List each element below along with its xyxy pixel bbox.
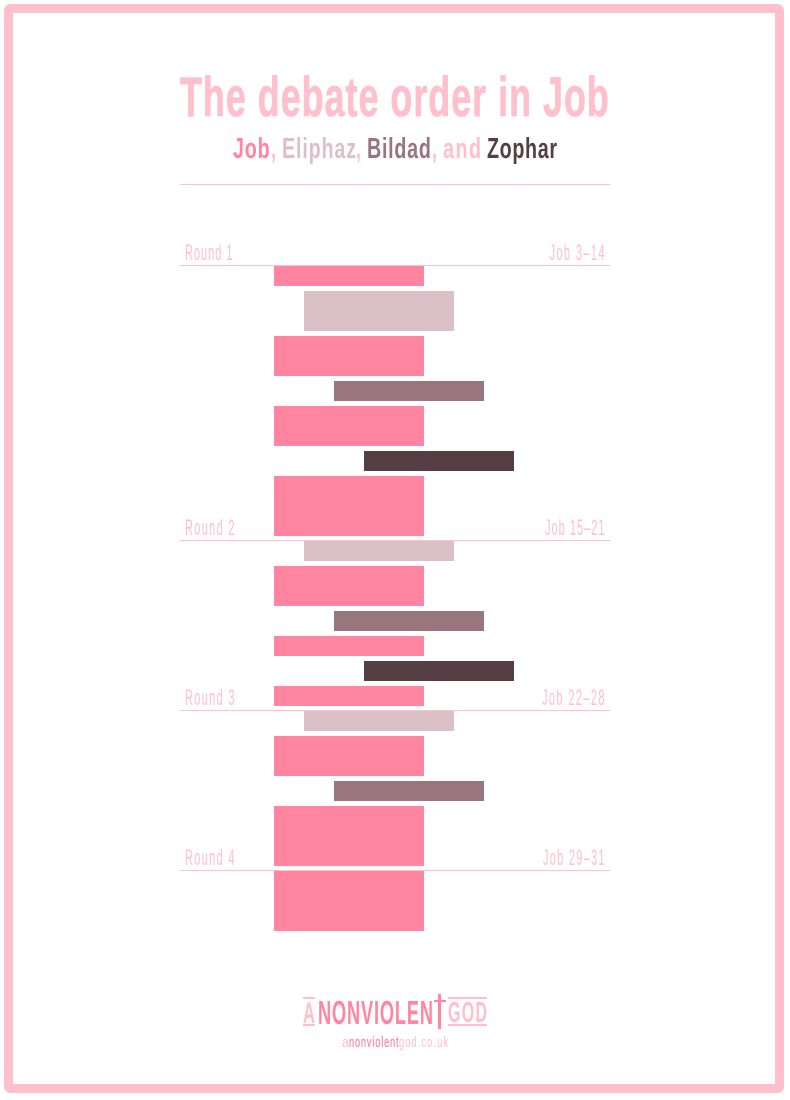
round labels: Round 4 [185, 845, 235, 870]
speech bars chart [274, 266, 514, 931]
subtitle: speakers legend: and [443, 133, 481, 165]
subtitle: speakers legend [233, 133, 557, 165]
website address: nonviolent [349, 1034, 399, 1051]
subtitle: speakers legend: Zophar [487, 133, 557, 165]
round labels [185, 240, 605, 870]
round labels: Job 22–28 [542, 685, 604, 710]
website address: god.co.uk [399, 1034, 449, 1051]
website address [342, 1034, 449, 1051]
logo: A Nonviolent God: A [303, 997, 315, 1030]
logo: A Nonviolent God: GOD [448, 996, 487, 1028]
subtitle: speakers legend: Bildad [367, 133, 431, 165]
subtitle: speakers legend: , [356, 133, 361, 165]
website address: a [342, 1034, 350, 1051]
round labels: Round 2 [185, 515, 234, 540]
round labels: Job 15–21 [545, 515, 604, 540]
subtitle: speakers legend: , [432, 133, 437, 165]
round labels: Job 29–31 [543, 845, 604, 870]
round dividers [180, 265, 610, 871]
round labels: Round 3 [185, 685, 234, 710]
title: The debate order in Job [180, 65, 609, 128]
round labels: Round 1 [185, 240, 232, 265]
subtitle: speakers legend: , [271, 133, 276, 165]
subtitle: speakers legend: Job [233, 133, 270, 165]
subtitle: speakers legend: Eliphaz [282, 133, 356, 165]
round labels: Job 3–14 [550, 240, 605, 265]
logo: A Nonviolent God: NONVIOLEN [318, 994, 433, 1031]
logo: A Nonviolent God [303, 994, 487, 1031]
